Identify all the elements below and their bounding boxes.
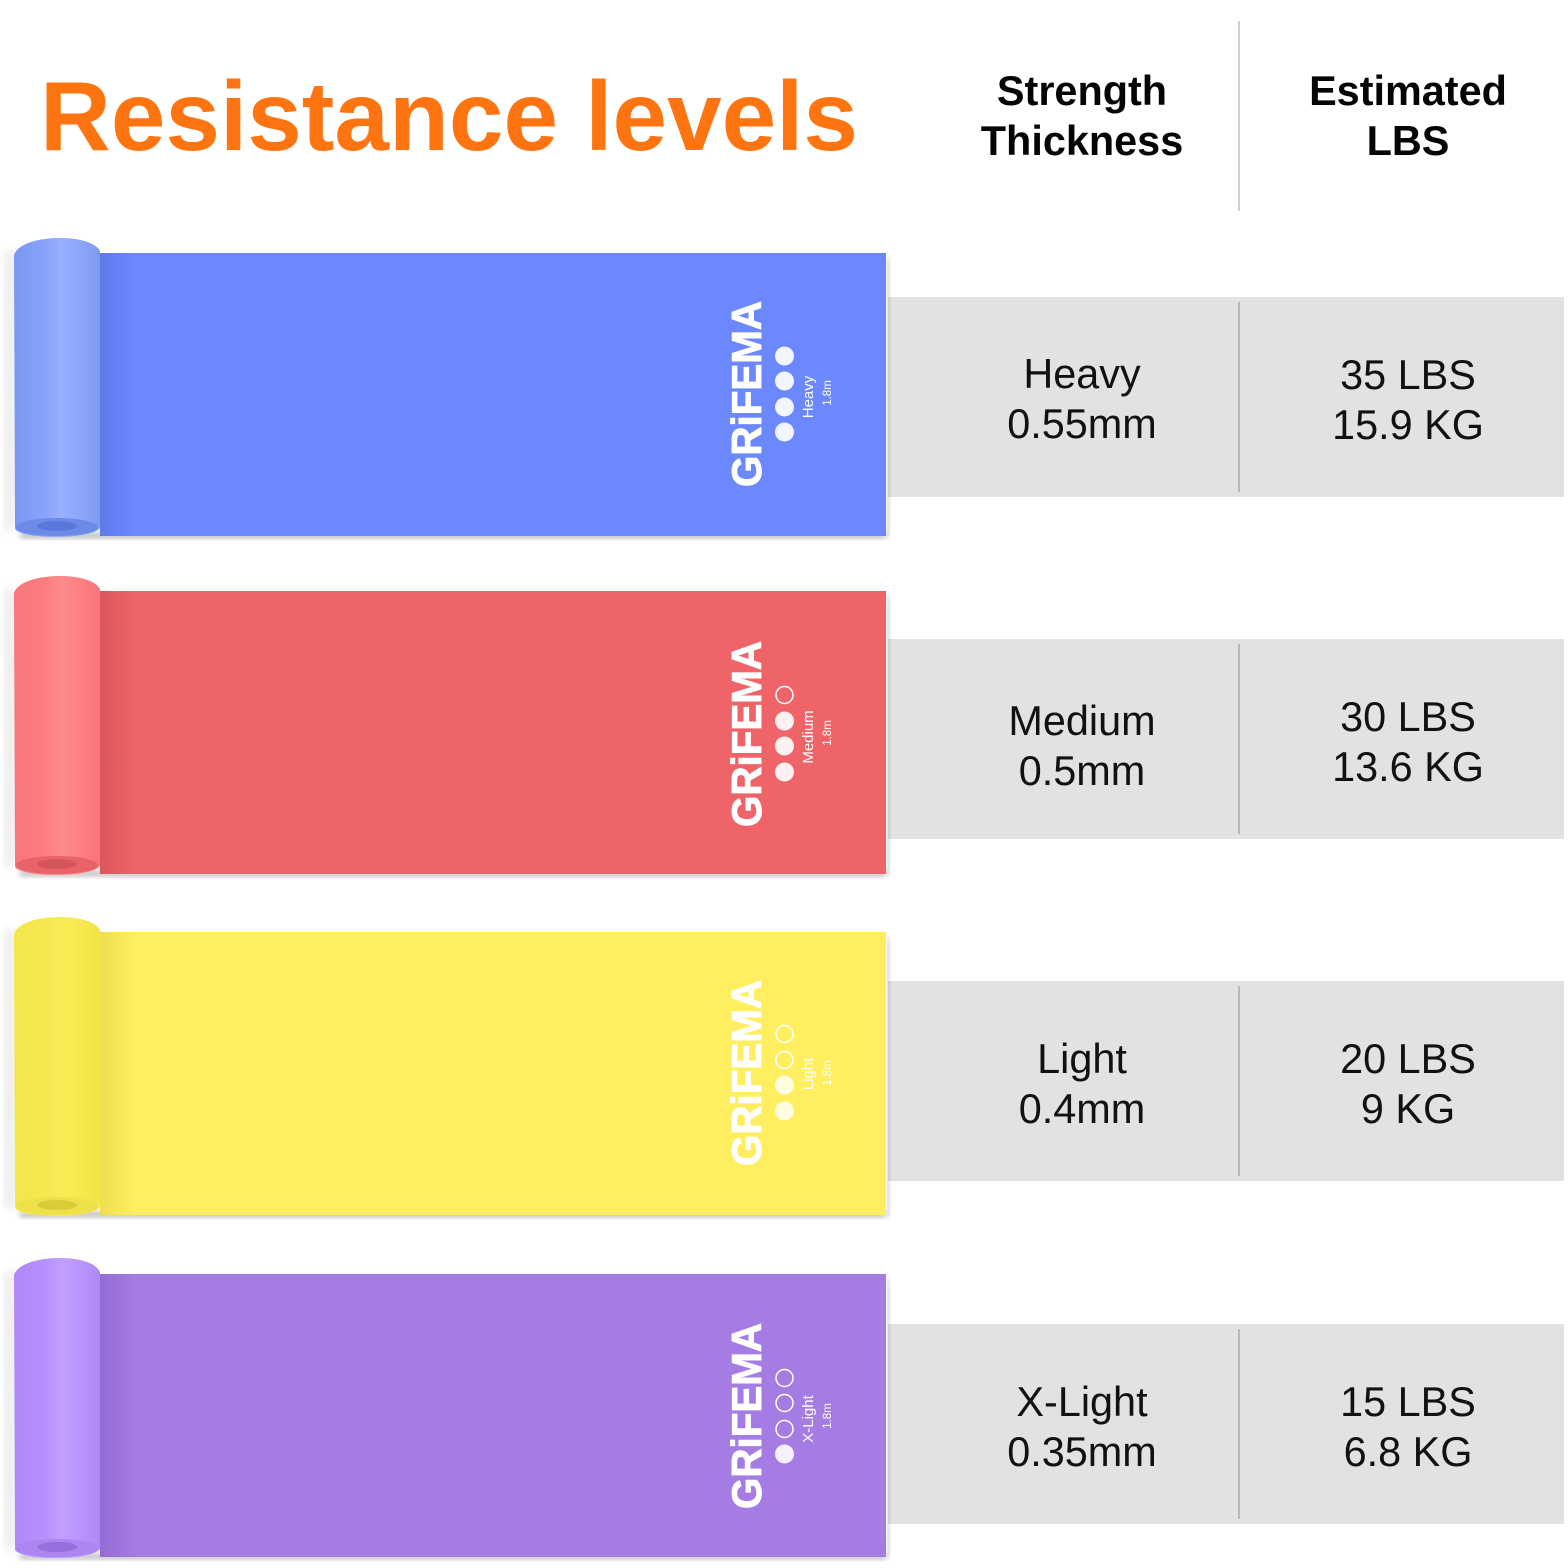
data panel: light: 0.4mm (1019, 1086, 1145, 1132)
column heading: estimated lbs: LBS (1367, 118, 1449, 164)
row: light (6, 917, 1564, 1217)
column heading: estimated lbs: Estimated (1309, 68, 1507, 114)
data panel: heavy: 0.55mm (1007, 401, 1157, 447)
brand label: Medium (800, 710, 817, 764)
data panel: medium (888, 639, 1564, 839)
data panel: medium: 13.6 KG (1332, 744, 1484, 790)
brand label (723, 1323, 834, 1509)
data panel: light: 20 LBS (1340, 1036, 1476, 1082)
roll: purple (6, 1258, 100, 1558)
data panel: light (888, 981, 1564, 1181)
brand label: X-Light (800, 1394, 817, 1443)
data panel: light: Light (1037, 1036, 1127, 1082)
data panel: medium: 0.5mm (1019, 748, 1145, 794)
data panel: heavy: 15.9 KG (1332, 402, 1484, 448)
band: yellow (6, 917, 890, 1217)
data panel: light: 9 KG (1361, 1086, 1455, 1132)
column heading: strength thickness: Strength (997, 68, 1167, 114)
brand label: Light (800, 1057, 817, 1090)
data panel: x-light: 15 LBS (1340, 1379, 1476, 1425)
data panel: heavy: 35 LBS (1340, 352, 1476, 398)
brand label (723, 301, 834, 487)
brand label: GRiFEMA (723, 980, 770, 1166)
brand label: Heavy (800, 375, 817, 418)
brand label: 1.8m (822, 1403, 834, 1429)
data panel: x-light: X-Light (1016, 1379, 1148, 1425)
column heading: strength thickness: Thickness (981, 118, 1183, 164)
brand label: GRiFEMA (723, 641, 770, 827)
band: purple (6, 1258, 890, 1559)
data panel: x-light: 6.8 KG (1344, 1429, 1472, 1475)
column heading: strength thickness (981, 68, 1183, 164)
row: x-light (6, 1258, 1564, 1559)
title: Resistance levels (40, 61, 858, 171)
row: medium (6, 576, 1564, 876)
data panel: heavy (888, 297, 1564, 497)
brand label: GRiFEMA (723, 301, 770, 487)
brand label: 1.8m (822, 720, 834, 746)
brand label (723, 980, 834, 1166)
data panel: x-light (888, 1324, 1564, 1524)
roll: yellow (6, 917, 100, 1216)
brand label: 1.8m (822, 1060, 834, 1086)
brand label: GRiFEMA (723, 1323, 770, 1509)
data panel: x-light: 0.35mm (1007, 1429, 1157, 1475)
row: heavy (6, 238, 1564, 538)
brand label (723, 641, 834, 827)
roll: red (6, 576, 100, 875)
brand label: 1.8m (822, 380, 834, 406)
data panel: medium: Medium (1008, 698, 1156, 744)
band: blue (6, 238, 890, 538)
roll: blue (6, 238, 100, 537)
column heading: estimated lbs (1309, 68, 1507, 164)
data panel: heavy: Heavy (1023, 351, 1141, 397)
data panel: medium: 30 LBS (1340, 694, 1476, 740)
band: red (6, 576, 890, 876)
